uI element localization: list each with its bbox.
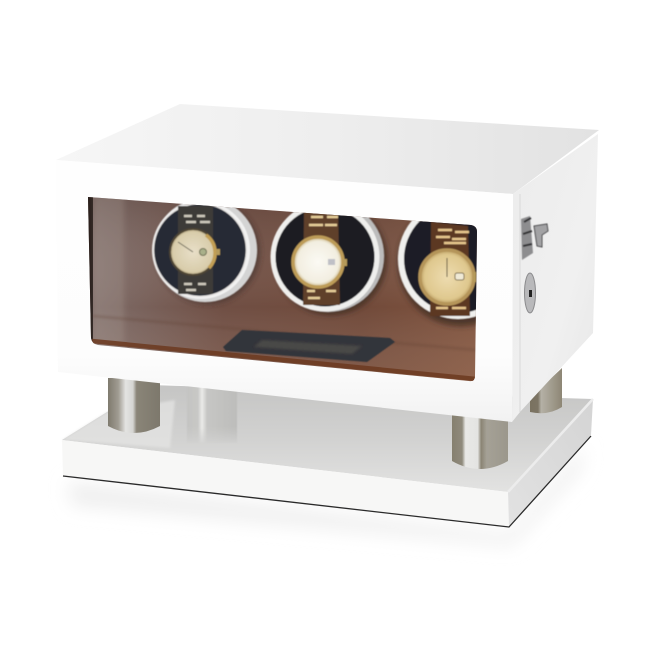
watch 2 — [293, 237, 343, 287]
cabinet front — [56, 160, 513, 422]
strap 3 — [430, 222, 470, 316]
cabinet top — [56, 104, 599, 194]
cabinet — [56, 104, 599, 422]
illustration: white triple watch winder cabinet — [57, 104, 599, 536]
rear pillar right — [530, 368, 562, 413]
winder 1 — [152, 198, 260, 304]
cabinet right side — [512, 134, 598, 422]
floor shadow — [68, 445, 585, 545]
side key lock — [524, 273, 536, 313]
base front face — [62, 440, 509, 527]
left window shadow — [88, 197, 93, 342]
strap 1 — [178, 206, 213, 294]
front left pillar — [108, 378, 160, 433]
winder 2 — [272, 200, 387, 315]
base bottom edge — [63, 436, 591, 527]
side hinge latch — [521, 216, 548, 260]
strap 2 — [303, 208, 340, 305]
accessory tray — [223, 330, 395, 362]
front right pillar — [452, 415, 508, 469]
shelf line — [93, 316, 476, 350]
base side face — [508, 399, 593, 527]
winder 3 — [395, 220, 477, 329]
watch 1 — [170, 229, 216, 275]
rear pillar reflection left — [188, 386, 237, 438]
base top surface — [62, 385, 593, 492]
watch 3 — [420, 250, 474, 304]
glass window — [88, 197, 477, 382]
base plinth — [62, 385, 593, 527]
